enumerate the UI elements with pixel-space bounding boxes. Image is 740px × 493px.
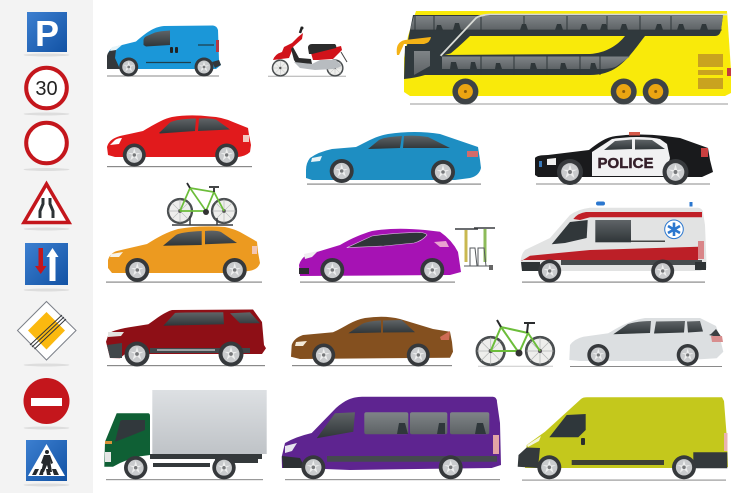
sign: speed limit 30 bbox=[24, 68, 70, 116]
vehicle: purple minibus bbox=[282, 397, 501, 480]
sign: end of priority road bbox=[18, 302, 76, 366]
upper deck windows bbox=[405, 15, 723, 56]
sign: priority over oncoming traffic bbox=[24, 243, 70, 292]
vehicle: blue compact van bbox=[107, 26, 221, 76]
green bicycle bbox=[477, 320, 554, 367]
vehicle: red coupe bbox=[107, 115, 252, 167]
vehicle: lime cargo van bbox=[518, 397, 728, 481]
rear bicycle rack bbox=[455, 228, 495, 270]
stripe bbox=[439, 14, 727, 58]
panel: road signs bbox=[0, 0, 93, 493]
cargo box bbox=[152, 390, 267, 454]
seats upper bbox=[436, 23, 708, 30]
cab bbox=[104, 413, 150, 467]
sign: road narrows bbox=[24, 184, 70, 230]
sign: no vehicles bbox=[24, 123, 70, 171]
vehicle: dark red SUV bbox=[106, 310, 266, 366]
cab window bbox=[404, 46, 441, 79]
vehicle: brown sedan bbox=[291, 317, 453, 366]
vehicle: police car bbox=[535, 132, 713, 185]
sign: no entry bbox=[24, 378, 70, 430]
rear vents bbox=[698, 54, 723, 67]
vehicle: green box truck bbox=[104, 390, 267, 480]
star of life bbox=[665, 220, 683, 239]
lower dark band bbox=[441, 36, 645, 75]
vehicle: orange sedan bbox=[106, 226, 262, 283]
sign: parking bbox=[24, 12, 70, 56]
sign: speed limit 30: 30 bbox=[35, 78, 58, 100]
vehicle: ambulance bbox=[521, 202, 707, 283]
vehicle: white station wagon bbox=[569, 318, 723, 367]
vehicle: blue sedan bbox=[306, 132, 481, 185]
mirror bbox=[397, 37, 431, 55]
sign: pedestrian crossing bbox=[24, 440, 70, 486]
POLICE text: POLICE bbox=[598, 156, 654, 172]
vehicle: yellow double-decker bus bbox=[397, 11, 731, 104]
sign: parking: P bbox=[35, 13, 59, 54]
chassis bbox=[150, 454, 262, 467]
vehicle: purple hatchback bbox=[299, 229, 461, 283]
wheels bbox=[452, 78, 669, 104]
yellow swoosh bbox=[450, 36, 624, 54]
vehicle: red scooter bbox=[268, 26, 347, 77]
bicycle on roof bbox=[168, 183, 236, 225]
